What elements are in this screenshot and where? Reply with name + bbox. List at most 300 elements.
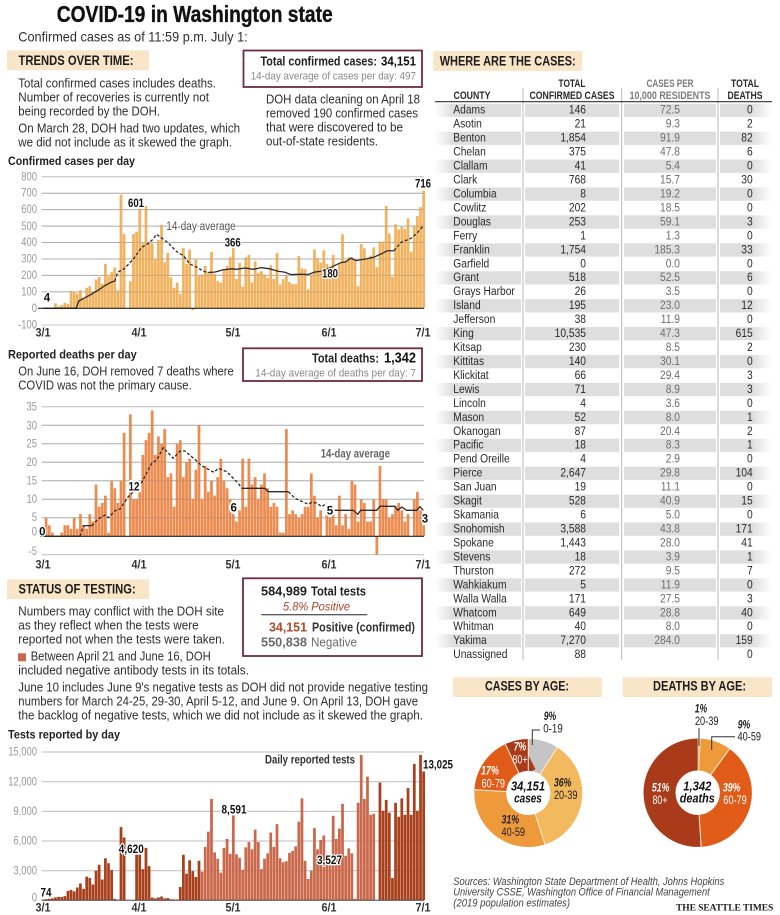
table: cases by county: 40.9 [660, 495, 680, 508]
bar chart: reported deaths per day: 5 [32, 511, 37, 524]
table: cases by county: 0 [747, 621, 753, 633]
heading: cases by age: CASES BY AGE: [485, 679, 569, 694]
donut chart: cases by age: 34,151 [511, 779, 545, 794]
donut chart: cases by age [474, 711, 577, 844]
text block: testing notes: June 10 includes June 9's negative tests as DOH did not provide negative testing [18, 681, 428, 695]
table: cases by county: 28.0 [660, 537, 680, 550]
bar chart: tests reported by day: 6,000 [13, 835, 37, 848]
bar chart: reported deaths per day: 5/1 [226, 559, 241, 571]
donut chart: cases by age: 60-79 [482, 778, 505, 790]
text block: trends notes: On March 28, DOH had two updates, which [18, 121, 240, 135]
table: cases by county: Douglas [453, 216, 491, 229]
text block: trends notes: we did not include as it skewed the graph. [17, 135, 232, 149]
table: cases by county: 253 [569, 216, 586, 229]
table: cases by county: 0 [747, 202, 753, 215]
table: cases by county: 82 [741, 132, 753, 145]
table: cases by county: 1,754 [560, 244, 586, 257]
donut chart: deaths by age: 40-59 [738, 732, 761, 744]
table: cases by county: 47.3 [660, 327, 680, 340]
table: cases by county: 4 [580, 397, 586, 410]
table: cases by county: King [453, 327, 474, 340]
donut chart: cases by age: 40-59 [502, 827, 525, 839]
bar chart: reported deaths per day: 20 [27, 456, 37, 469]
table: cases by county: 2 [747, 118, 753, 131]
table: cases by county: 12 [741, 299, 753, 312]
table: cases by county: Garfield [453, 258, 489, 271]
table: cases by county: Clark [453, 174, 478, 187]
table: cases by county: 29.4 [660, 369, 680, 382]
donut chart: cases by age: 31% [501, 814, 519, 826]
table: cases by county: Whitman [453, 621, 494, 633]
bar chart: confirmed cases per day: 4 [44, 293, 51, 305]
bar chart: confirmed cases per day [18, 170, 431, 340]
bar chart: tests reported by day: 13,025 [423, 759, 454, 771]
table: cases by county: Snohomish [453, 523, 505, 536]
bar chart: tests reported by day: 9,000 [13, 805, 37, 818]
table: cases by county: 72.5 [660, 104, 680, 117]
heading: deaths by age: DEATHS BY AGE: [653, 679, 746, 694]
table: cases by county: 0 [580, 258, 586, 271]
table: cases by county: Adams [453, 104, 486, 117]
bar chart: confirmed cases per day: -100 [18, 318, 37, 332]
heading: cases by age [453, 677, 602, 697]
text block: testing notes [18, 604, 428, 722]
donut chart: deaths by age: 60-79 [723, 795, 747, 807]
text block: June 16 deaths note [18, 365, 234, 393]
callout: total deaths: Total deaths: [312, 351, 379, 365]
table: cases by county: 7 [747, 565, 753, 578]
table: cases by county: 59.1 [660, 216, 680, 229]
bar chart: confirmed cases per day: 180 [322, 268, 338, 280]
table: cases by county: 23.0 [660, 299, 680, 312]
chart heading: tests reported by day: Tests reported by day [8, 727, 120, 741]
text block: testing notes: Numbers may conflict with the DOH site [18, 604, 224, 618]
table: cases by county: CONFIRMED CASES [530, 90, 615, 102]
table: cases by county: 43.8 [660, 523, 680, 536]
bar chart: confirmed cases per day: 5/1 [226, 328, 241, 340]
text block: testing notes: Between April 21 and June 16, DOH [31, 649, 211, 663]
table: cases by county: Grays Harbor [453, 286, 515, 298]
bar chart: tests reported by day: 3,527 [317, 855, 342, 867]
donut chart: cases by age: 17% [481, 766, 499, 778]
table: cases by county: 5 [580, 579, 586, 592]
table: cases by county: 1,443 [560, 537, 586, 550]
bar chart: reported deaths per day: 15 [27, 475, 37, 488]
bar chart: confirmed cases per day: 601 [128, 198, 145, 210]
callout: total deaths: 14-day average of deaths per day: 7 [255, 368, 416, 380]
table: cases by county: Klickitat [453, 369, 489, 382]
donut chart: deaths by age: deaths [680, 791, 715, 806]
heading: status of testing: STATUS OF TESTING: [18, 581, 136, 596]
donut chart: deaths by age: 39% [723, 783, 741, 795]
callout: testing totals: 34,151 [269, 620, 307, 635]
table: cases by county: 11.9 [661, 579, 680, 592]
table: cases by county: 3 [747, 593, 753, 606]
table: cases by county: 2 [747, 341, 753, 354]
table: cases by county: TOTAL [558, 78, 586, 90]
heading: trends over time: TRENDS OVER TIME: [18, 53, 134, 68]
table: cases by county: 18 [575, 439, 586, 452]
table: cases by county: Yakima [453, 635, 488, 647]
table: cases by county: Kittitas [453, 355, 485, 368]
table: cases by county: San Juan [453, 481, 497, 494]
table: cases by county: 0.0 [666, 258, 680, 271]
donut chart: cases by age: 0-19 [543, 724, 563, 736]
table: cases by county: 1,854 [560, 132, 586, 145]
donut chart: cases by age: cases [514, 791, 542, 806]
table: cases by county: 10,535 [555, 327, 586, 340]
table: cases by county: 0 [747, 160, 753, 173]
bar chart: tests reported by day: 4/1 [132, 903, 147, 915]
table: cases by county: 649 [569, 607, 586, 620]
callout: testing totals: Total tests [311, 585, 366, 599]
table: cases by county: 171 [569, 593, 586, 606]
bar chart: confirmed cases per day: 200 [21, 269, 37, 282]
table: cases by county: 15.7 [660, 174, 680, 187]
table: cases by county: 518 [569, 272, 586, 284]
donut chart: cases by age: 9% [544, 711, 556, 723]
table: cases by county: 3 [747, 383, 753, 396]
table: cases by county: 3.9 [666, 551, 680, 564]
table: cases by county: 6 [747, 272, 753, 284]
table: cases by county: 9.5 [666, 565, 680, 578]
bar chart: confirmed cases per day: 716 [415, 179, 431, 191]
table: cases by county: 15 [741, 495, 753, 508]
callout: total confirmed cases [244, 50, 422, 87]
table: cases by county: Mason [453, 411, 484, 424]
table: cases by county: 8.3 [666, 439, 680, 452]
bar chart: tests reported by day: 12,000 [8, 775, 37, 789]
donut chart: deaths by age: 51% [652, 783, 670, 795]
donut chart: cases by age: 20-39 [554, 790, 577, 802]
text block: DOH data cleaning note: removed 190 confirmed cases [266, 106, 418, 120]
table: cases by county: 0 [747, 453, 753, 466]
table: cases by county: 66 [575, 369, 586, 382]
bar chart: confirmed cases per day: 700 [21, 187, 37, 200]
table: cases by county: Island [453, 299, 481, 312]
table: cases by county: Skamania [453, 509, 500, 522]
heading: where are the cases: WHERE ARE THE CASES: [440, 53, 576, 68]
table: cases by county: Kitsap [453, 341, 482, 354]
text block: sources: Sources: Washington State Department of Health, Johns Hopkins [453, 876, 725, 888]
table: cases by county: 0 [747, 313, 753, 326]
text block: sources [453, 876, 725, 910]
table: cases by county: 18 [575, 551, 586, 564]
table: cases by county: 615 [736, 327, 753, 340]
text block: trends notes: Number of recoveries is currently not [18, 91, 209, 105]
text block: testing notes: the backlog of negative tests, which we did not include as it skewed the graph. [18, 708, 423, 722]
table: cases by county: 8.5 [666, 341, 680, 354]
table: cases by county: 0 [747, 258, 753, 271]
bar chart: reported deaths per day: 12 [128, 481, 140, 493]
table: cases by county: 3,588 [560, 523, 586, 536]
table: cases by county: 30.1 [660, 355, 680, 368]
table: cases by county: 768 [569, 174, 586, 187]
table: cases by county: Spokane [453, 537, 494, 550]
callout: total deaths: 1,342 [384, 350, 416, 366]
callout: testing totals: Negative [311, 636, 357, 650]
table: cases by county: 38 [575, 313, 586, 326]
bar chart: tests reported by day: 6/1 [322, 903, 337, 915]
text block: June 16 deaths note: On June 16, DOH removed 7 deaths where [18, 365, 234, 379]
bar chart: tests reported by day: 3/1 [36, 903, 51, 915]
text block: trends notes: being recorded by the DOH. [18, 105, 160, 119]
table: cases by county: 40 [575, 621, 586, 633]
table: cases by county: 0 [747, 355, 753, 368]
table: cases by county: Skagit [453, 495, 482, 508]
table: cases by county: 1 [747, 551, 753, 564]
table: cases by county: 6 [747, 146, 753, 159]
table: cases by county: 52 [575, 411, 586, 424]
bar chart: confirmed cases per day: 14-day average [166, 221, 236, 233]
table: cases by county: 47.8 [660, 146, 680, 159]
bar chart: reported deaths per day: 5 [327, 505, 334, 517]
table: cases by county: Columbia [453, 188, 497, 201]
panel: deaths by age [623, 677, 772, 847]
table: cases by county: 2 [747, 425, 753, 438]
table: cases by county: Franklin [453, 244, 490, 257]
table: cases by county: 1 [747, 411, 753, 424]
callout: testing totals: 550,838 [261, 635, 307, 650]
panel: where are the cases [433, 51, 772, 661]
table: cases by county: Okanogan [453, 425, 501, 438]
table: cases by county: 195 [569, 299, 586, 312]
table: cases by county: 0 [747, 509, 753, 522]
text block: trends notes [17, 77, 240, 149]
bar chart: confirmed cases per day: 300 [21, 253, 37, 266]
bar chart: confirmed cases per day: 6/1 [322, 328, 337, 340]
text block: testing notes: numbers for March 24-25, 29-30, April 5-12, and June 9. On April 13, DOH gave [18, 694, 418, 708]
table: cases by county: Lewis [453, 383, 480, 396]
bar chart: reported deaths per day: 25 [27, 438, 37, 451]
table: cases by county: 528 [569, 495, 586, 508]
table: cases by county: 171 [736, 523, 753, 536]
table: cases by county: Clallam [453, 160, 487, 173]
table: cases by county: Pierce [453, 467, 482, 480]
callout: total confirmed cases: Total confirmed cases: [260, 55, 377, 69]
bar chart: tests reported by day: 5/1 [226, 903, 241, 915]
table: cases by county: 230 [569, 341, 586, 354]
bar chart: reported deaths per day: 35 [27, 401, 37, 414]
bar chart: confirmed cases per day: 500 [21, 220, 37, 233]
callout: testing totals [243, 578, 422, 656]
text block: testing notes: reported not when the tests were taken. [18, 632, 225, 646]
table: cases by county: 41 [575, 160, 586, 173]
bar chart: confirmed cases per day: 400 [21, 236, 37, 249]
table: cases by county: 3.6 [666, 397, 680, 410]
donut chart: deaths by age [652, 703, 761, 847]
table: cases by county: 40 [741, 607, 753, 620]
callout: total confirmed cases: 34,151 [381, 55, 416, 69]
table: cases by county: 91.9 [660, 132, 680, 145]
table: cases by county: 6 [580, 509, 586, 522]
table: cases by county: 4 [580, 453, 586, 466]
chart heading: reported deaths per day: Reported deaths per day [8, 347, 137, 361]
text block: sources: (2019 population estimates) [453, 898, 570, 910]
bar chart: reported deaths per day: -5 [29, 545, 37, 558]
callout: testing totals: 584,989 [261, 584, 307, 599]
bar chart: tests reported by day: 8,591 [222, 804, 247, 816]
subtitle: Confirmed cases as of 11:59 p.m. July 1: [18, 29, 248, 45]
table: cases by county: Pacific [453, 439, 484, 452]
bar chart: reported deaths per day: 14-day average [321, 448, 390, 460]
table: cases by county: 0 [747, 648, 753, 661]
callout: testing totals: Positive (confirmed) [312, 621, 415, 635]
table: cases by county: CASES PER [646, 78, 694, 90]
bar chart: confirmed cases per day: 7/1 [416, 328, 431, 340]
table: cases by county: 7,270 [560, 635, 586, 647]
heading: status of testing [7, 579, 149, 599]
callout: testing totals: 5.8% Positive [283, 599, 350, 613]
table: cases by county: 8 [580, 188, 586, 201]
table: cases by county: 0 [747, 397, 753, 410]
table: cases by county: 29.8 [660, 467, 680, 480]
bar chart: tests reported by day: 3,000 [13, 864, 37, 878]
table: cases by county: 1 [580, 230, 586, 243]
text block: DOH data cleaning note: DOH data cleaning on April 18 [266, 92, 420, 106]
table: cases by county: 8.0 [666, 411, 680, 424]
table: cases by county: 10,000 RESIDENTS [630, 90, 711, 102]
table: cases by county: 18.5 [660, 202, 680, 215]
table: cases by county: 5.0 [666, 509, 680, 522]
bar chart: reported deaths per day: 3/1 [36, 559, 51, 571]
table: cases by county: 21 [575, 118, 586, 131]
bar chart: reported deaths per day: 30 [27, 419, 37, 433]
table: cases by county: Asotin [453, 118, 482, 131]
table: cases by county: Stevens [453, 551, 491, 564]
panel: cases by age [453, 677, 602, 844]
chart heading: confirmed cases per day: Confirmed cases per day [8, 154, 135, 168]
table: cases by county: 146 [569, 104, 586, 117]
table: cases by county: DEATHS [728, 90, 763, 102]
heading: deaths by age [623, 677, 772, 697]
bar chart: reported deaths per day: 6 [230, 503, 237, 515]
table: cases by county: 3 [747, 369, 753, 382]
bar chart: confirmed cases per day: 366 [225, 238, 241, 250]
table: cases by county: 0 [747, 104, 753, 117]
table: cases by county: 3 [747, 216, 753, 229]
table: cases by county: 33 [741, 244, 753, 257]
donut chart: deaths by age: 1,342 [683, 779, 712, 794]
bar chart: reported deaths per day [27, 401, 431, 571]
donut chart: deaths by age: 9% [738, 719, 750, 731]
table: cases by county: 0 [747, 579, 753, 592]
table: cases by county: 41 [741, 537, 753, 550]
table: cases by county: 0 [747, 188, 753, 201]
table: cases by county: 20.4 [660, 425, 680, 438]
donut chart: deaths by age: 1% [695, 703, 707, 715]
table: cases by county: 71 [575, 383, 586, 396]
bar chart: reported deaths per day: 0 [32, 526, 37, 539]
bar chart: tests reported by day: 7/1 [416, 903, 431, 915]
text block: DOH data cleaning note: that were discovered to be [266, 120, 403, 134]
bar chart: confirmed cases per day: 4/1 [132, 328, 147, 340]
table: cases by county: 9.3 [666, 118, 680, 131]
table: cases by county: 28.8 [660, 607, 680, 620]
bar chart: tests reported by day: Daily reported tests [265, 754, 355, 766]
table: cases by county: COUNTY [454, 90, 491, 102]
table: cases by county: Grant [453, 272, 479, 284]
table: cases by county: 3.5 [666, 286, 680, 298]
table: cases by county: 88 [575, 648, 586, 661]
bar chart: reported deaths per day: 0 [39, 527, 46, 539]
bar chart: tests reported by day: 0 [32, 892, 37, 905]
table: cases by county: 87 [575, 425, 586, 438]
panel: status of testing [7, 578, 428, 722]
table: cases by county: Benton [453, 132, 486, 145]
table: cases by county: 5.4 [666, 160, 680, 173]
table: cases by county: 0 [747, 230, 753, 243]
text block: DOH data cleaning note: out-of-state residents. [266, 134, 378, 148]
bar chart: confirmed cases per day: 0 [32, 302, 37, 315]
table: cases by county: 140 [569, 355, 586, 368]
table: cases by county: 104 [736, 467, 753, 480]
table: cases by county: 8.9 [666, 383, 680, 396]
donut chart: cases by age: 80+ [512, 754, 528, 766]
donut chart: cases by age: 7% [514, 742, 526, 754]
table: cases by county: Thurston [453, 565, 494, 578]
heading: trends over time [7, 50, 149, 70]
bar chart: reported deaths per day: 7/1 [416, 559, 431, 571]
bar chart: reported deaths per day: 4/1 [132, 559, 147, 571]
table: cases by county: 375 [569, 146, 586, 159]
bar chart: tests reported by day: 74 [40, 888, 52, 900]
callout: total deaths [243, 348, 422, 381]
table: cases by county: Chelan [453, 146, 486, 159]
table: cases by county: 8.0 [666, 621, 680, 633]
bar chart: confirmed cases per day: 3/1 [36, 328, 51, 340]
table: cases by county: Cowlitz [453, 202, 486, 215]
bar chart: reported deaths per day: 6/1 [322, 559, 337, 571]
table: cases by county: 159 [736, 635, 753, 647]
bar chart: tests reported by day: 4,620 [119, 844, 144, 856]
table: cases by county: 202 [569, 202, 586, 215]
donut chart: cases by age: 36% [554, 777, 572, 789]
text block: testing notes: included negative antibody tests in its totals. [18, 663, 249, 677]
table: cases by county: Lincoln [453, 397, 486, 410]
table: cases by county: 30 [741, 174, 753, 187]
bar chart: reported deaths per day: 10 [27, 493, 37, 506]
table: cases by county: Jefferson [453, 313, 495, 326]
text block: June 16 deaths note: COVID was not the primary cause. [18, 379, 192, 393]
table: cases by county: Wahkiakum [453, 579, 506, 592]
bar chart: confirmed cases per day: 800 [21, 170, 37, 184]
table: cases by county: Unassigned [453, 648, 507, 661]
donut chart: deaths by age: 20-39 [695, 716, 718, 728]
bar chart: tests reported by day: 15,000 [8, 746, 37, 759]
table: cases by county: 19 [575, 481, 586, 494]
table: cases by county: 272 [569, 565, 586, 578]
table: cases by county: TOTAL [731, 78, 759, 90]
text block: testing notes: as they reflect when the tests were [18, 618, 199, 632]
heading: where are the cases [433, 51, 582, 71]
table: cases by county: Whatcom [453, 607, 497, 620]
bar chart: confirmed cases per day: 100 [21, 286, 37, 299]
table: cases by county: 2,647 [560, 467, 586, 480]
table: cases by county: 1.3 [666, 230, 680, 243]
table: cases by county: 0 [747, 481, 753, 494]
table: cases by county: 185.3 [654, 244, 680, 257]
bar chart: confirmed cases per day: 600 [21, 203, 37, 216]
table: cases by county: 2.9 [666, 453, 680, 466]
table: cases by county: 11.1 [661, 481, 680, 494]
bar chart: tests reported by day [8, 746, 454, 915]
table: cases by county [435, 78, 772, 661]
table: cases by county: Pend Oreille [453, 453, 510, 466]
text block: DOH data cleaning note [266, 92, 420, 148]
text block: trends notes: Total confirmed cases includes deaths. [18, 77, 216, 91]
table: cases by county: 0 [747, 286, 753, 298]
